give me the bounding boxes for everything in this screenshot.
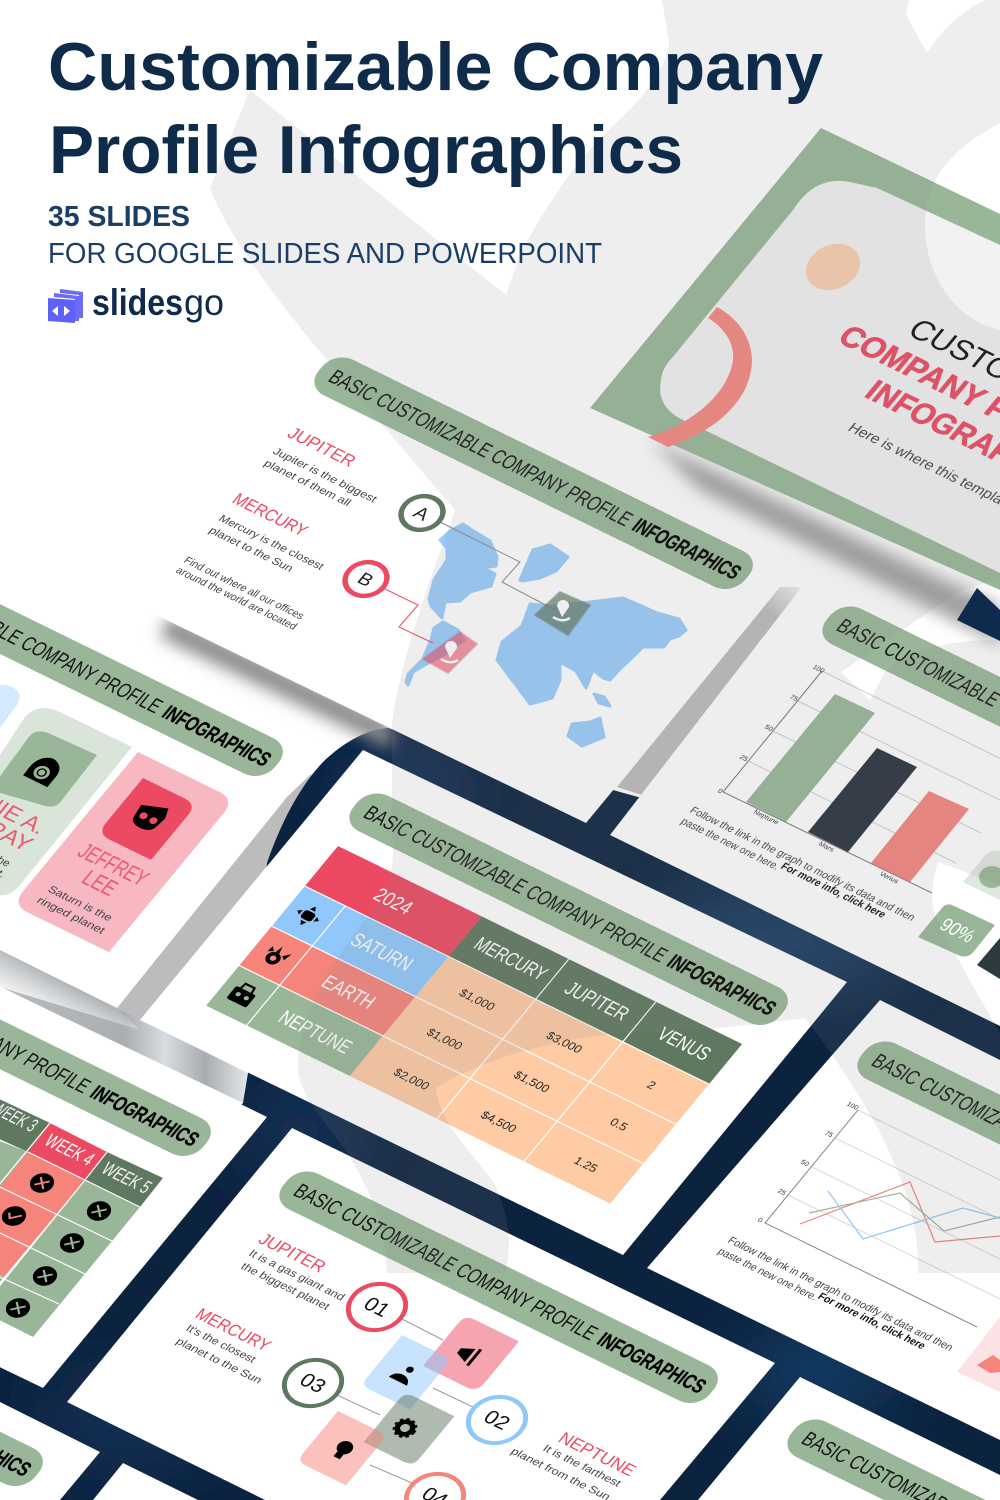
panel: blue card: [0, 685, 20, 728]
data table: JUPITER: [560, 978, 634, 1025]
connector lines: [383, 522, 555, 643]
slide surface: [67, 1128, 775, 1500]
icon: stacked slides: [48, 289, 83, 323]
bar chart: Mars: [817, 841, 836, 854]
slide surface: [0, 200, 900, 823]
header pill: BASIC CUSTOMIZABLE COMPANY PROFILE: [359, 801, 673, 967]
number circle 02: [457, 1389, 537, 1451]
line chart: 100: [845, 1101, 860, 1112]
subtitle: [48, 201, 602, 270]
bar chart: 0: [716, 788, 724, 795]
line chart: 25: [776, 1188, 787, 1197]
circle marker A: [393, 490, 451, 536]
status icons: [0, 1170, 116, 1321]
text block: Jupiter: It is a gas giant and: [246, 1248, 347, 1303]
slide surface: [698, 1377, 1000, 1500]
header pill: BASIC CUSTOMIZABLE COMPANY PROFILE: [289, 1179, 603, 1345]
text block: Neptune: NEPTUNE: [554, 1429, 640, 1480]
data table: 2: [644, 1078, 659, 1092]
stat badge: 90%: [918, 904, 995, 957]
text block: Jupiter: [238, 1230, 347, 1313]
text block: Mercury: Mercury is the closest: [216, 513, 326, 572]
chart caption: Follow the link in the graph to modify its data and then: [687, 805, 917, 923]
map: world continents: [406, 524, 686, 746]
bar chart: 75: [788, 694, 799, 703]
data table: $3,000: [543, 1029, 585, 1056]
line chart: 50: [799, 1159, 810, 1168]
data table: $1,000: [424, 1026, 466, 1053]
title: Customizable Company: [48, 29, 823, 105]
column labels: WEEK 4: [40, 1131, 99, 1170]
navy backing sheet: [0, 700, 1000, 1500]
dark badge: [977, 938, 1000, 985]
text block: Jupiter: JUPITER: [283, 424, 360, 470]
bar chart: 50: [763, 724, 774, 733]
number circle 02: 02: [479, 1406, 514, 1434]
slide surface: [610, 557, 1000, 1026]
line chart: 0: [756, 1217, 764, 1224]
data table: VENUS: [652, 1023, 715, 1065]
text block: Mercury: MERCURY: [228, 490, 312, 540]
header pill: INFOGRAPHICS: [592, 1328, 711, 1398]
wordmark: slides: [92, 282, 183, 323]
text block: Jupiter: [261, 424, 379, 509]
slide surface: [647, 1000, 1000, 1440]
profile name: Jeffrey Lee: JEFFREY: [72, 839, 154, 891]
icon: gear: [390, 1416, 420, 1440]
green icon tile: [0, 731, 97, 807]
profile name: Jeffrey Lee: LEE: [76, 866, 123, 901]
slide surface: [0, 967, 267, 1388]
text block: Jupiter: planet of them all: [261, 458, 353, 509]
slide: team profiles: [0, 538, 292, 952]
location marker: green: [535, 592, 590, 635]
title: [48, 29, 823, 188]
title: Profile Infographics: [49, 112, 683, 188]
chart caption: For more info, click here: [815, 1291, 928, 1352]
text block: Mercury: planet to the Sun: [173, 1336, 264, 1386]
translucent background shape: [210, 0, 1000, 1273]
panel: pink profile card: [12, 752, 235, 952]
data table: 1.25: [571, 1154, 601, 1175]
shadow band: people slide edge: [117, 750, 363, 1020]
header pill: INFOGRAPHICS: [627, 514, 746, 584]
data table: 0.5: [607, 1115, 631, 1134]
chart caption: paste the new one here.: [678, 816, 782, 872]
header pill: INFOGRAPHICS: [85, 1081, 204, 1151]
profile name: Jeffrey Lee: [72, 839, 154, 901]
column labels: [0, 1099, 156, 1198]
header pill: INFOGRAPHICS: [157, 701, 276, 771]
text block: offices note: Find out where all our offices: [181, 555, 307, 622]
data table: 2024: [369, 884, 418, 919]
shadow under title slide: [650, 440, 1000, 645]
circle marker B: B: [353, 569, 377, 591]
data table: $2,000: [391, 1066, 433, 1093]
icon: man with glasses: [127, 798, 172, 834]
text block: Neptune: [508, 1429, 640, 1500]
bar chart: [716, 664, 1000, 893]
red icon tile: [97, 778, 197, 860]
navy patch under title slide: [957, 588, 1000, 641]
shadow band right of map slide: [617, 587, 803, 795]
text block: Mercury: MERCURY: [191, 1305, 275, 1355]
icon: light bulb: [330, 1439, 356, 1461]
slide: world map: [0, 200, 900, 823]
line chart: 75: [823, 1130, 834, 1139]
shadow under map slide: [160, 615, 392, 750]
chart caption: Follow the link in the graph to modify its data and then: [725, 1235, 955, 1353]
profile description: [34, 884, 115, 936]
circle marker A: A: [409, 503, 434, 525]
inner panel: [660, 181, 1000, 573]
header pill: INFOGRAPHICS: [662, 950, 781, 1020]
profile description: Saturn is the: [45, 884, 115, 924]
pale pink card: [957, 1317, 1000, 1392]
wordmark: go: [184, 282, 224, 323]
slidesgo logo: [48, 282, 224, 323]
location marker: pink: [423, 632, 477, 673]
text block: Jupiter: the biggest planet: [238, 1261, 332, 1313]
decorative peach ellipse: [798, 235, 868, 299]
slide: line chart: [647, 1000, 1000, 1440]
slide surface: [0, 1397, 100, 1500]
green frame: [590, 128, 1000, 590]
bar chart: 25: [738, 754, 749, 763]
slide: title cover: [590, 128, 1000, 590]
data table: $1,000: [456, 986, 498, 1013]
line chart: [756, 1101, 1000, 1327]
header pill: [0, 1248, 52, 1492]
data table: NEPTUNE: [274, 1007, 357, 1058]
data table: [206, 846, 742, 1204]
subtitle: 35 SLIDES: [48, 201, 190, 233]
data table: SATURN: [345, 929, 417, 975]
text block: Neptune: planet from the Sun: [508, 1446, 613, 1500]
text block: Mercury: planet to the Sun: [206, 525, 295, 574]
text block: Mercury: [206, 490, 326, 574]
connector lines: [337, 1318, 475, 1483]
number circle 01: [337, 1276, 417, 1338]
slide: bottom left: [0, 1248, 100, 1500]
diamond tiles: [297, 1315, 519, 1485]
bar chart: Venus: [878, 871, 900, 885]
slide: week schedule table: [0, 918, 267, 1388]
text block: Jupiter: JUPITER: [254, 1230, 330, 1276]
panel: green profile card: [0, 708, 132, 895]
column labels: WEEK 5: [97, 1159, 156, 1198]
data table: $1,500: [511, 1068, 553, 1095]
data table: $4,500: [478, 1108, 520, 1135]
data table: EARTH: [317, 972, 380, 1013]
profile name: partial: [0, 771, 52, 880]
icon: person: [389, 1362, 419, 1386]
icon: megaphone: [453, 1342, 482, 1366]
profile description: ringed planet: [34, 895, 107, 936]
chart caption: For more info, click here: [778, 861, 888, 920]
circle marker B: [337, 556, 395, 602]
data table: MERCURY: [469, 934, 552, 985]
slide surface: [140, 750, 847, 1255]
pale green card with check: [963, 851, 1000, 905]
stat badge: 90%: 90%: [935, 915, 980, 947]
bar chart: Neptune: [752, 809, 780, 826]
decorative ring: [648, 307, 752, 447]
slide: numbered process: [67, 1128, 775, 1500]
text block: offices note: around the world are located: [173, 565, 299, 632]
shadow band: week slide edge: [0, 950, 248, 1103]
header pill: BASIC CUSTOMIZABLE COMPANY PROFILE: [324, 365, 638, 531]
chart caption: paste the new one here.: [715, 1246, 820, 1303]
icon: woman face: [23, 753, 66, 787]
number circle 04: [395, 1466, 475, 1500]
number circle 01: 01: [359, 1293, 394, 1321]
text block: Mercury: It's the closest: [183, 1323, 258, 1365]
number circle 03: 03: [295, 1369, 330, 1397]
slide: bar chart: [610, 557, 1000, 1026]
text block: Mercury: [173, 1305, 275, 1386]
slide: bottom centre corner: [93, 1463, 198, 1500]
slide: bottom right: [698, 1377, 1000, 1500]
number circle 03: [273, 1352, 353, 1414]
table columns: [0, 1098, 163, 1337]
bar chart: 100: [811, 664, 826, 675]
slide: comparison table: [140, 750, 847, 1255]
subtitle: FOR GOOGLE SLIDES AND POWERPOINT: [48, 238, 602, 270]
text block: Jupiter: Jupiter is the biggest: [270, 446, 379, 505]
text block: Neptune: It is the farthest: [540, 1443, 623, 1489]
